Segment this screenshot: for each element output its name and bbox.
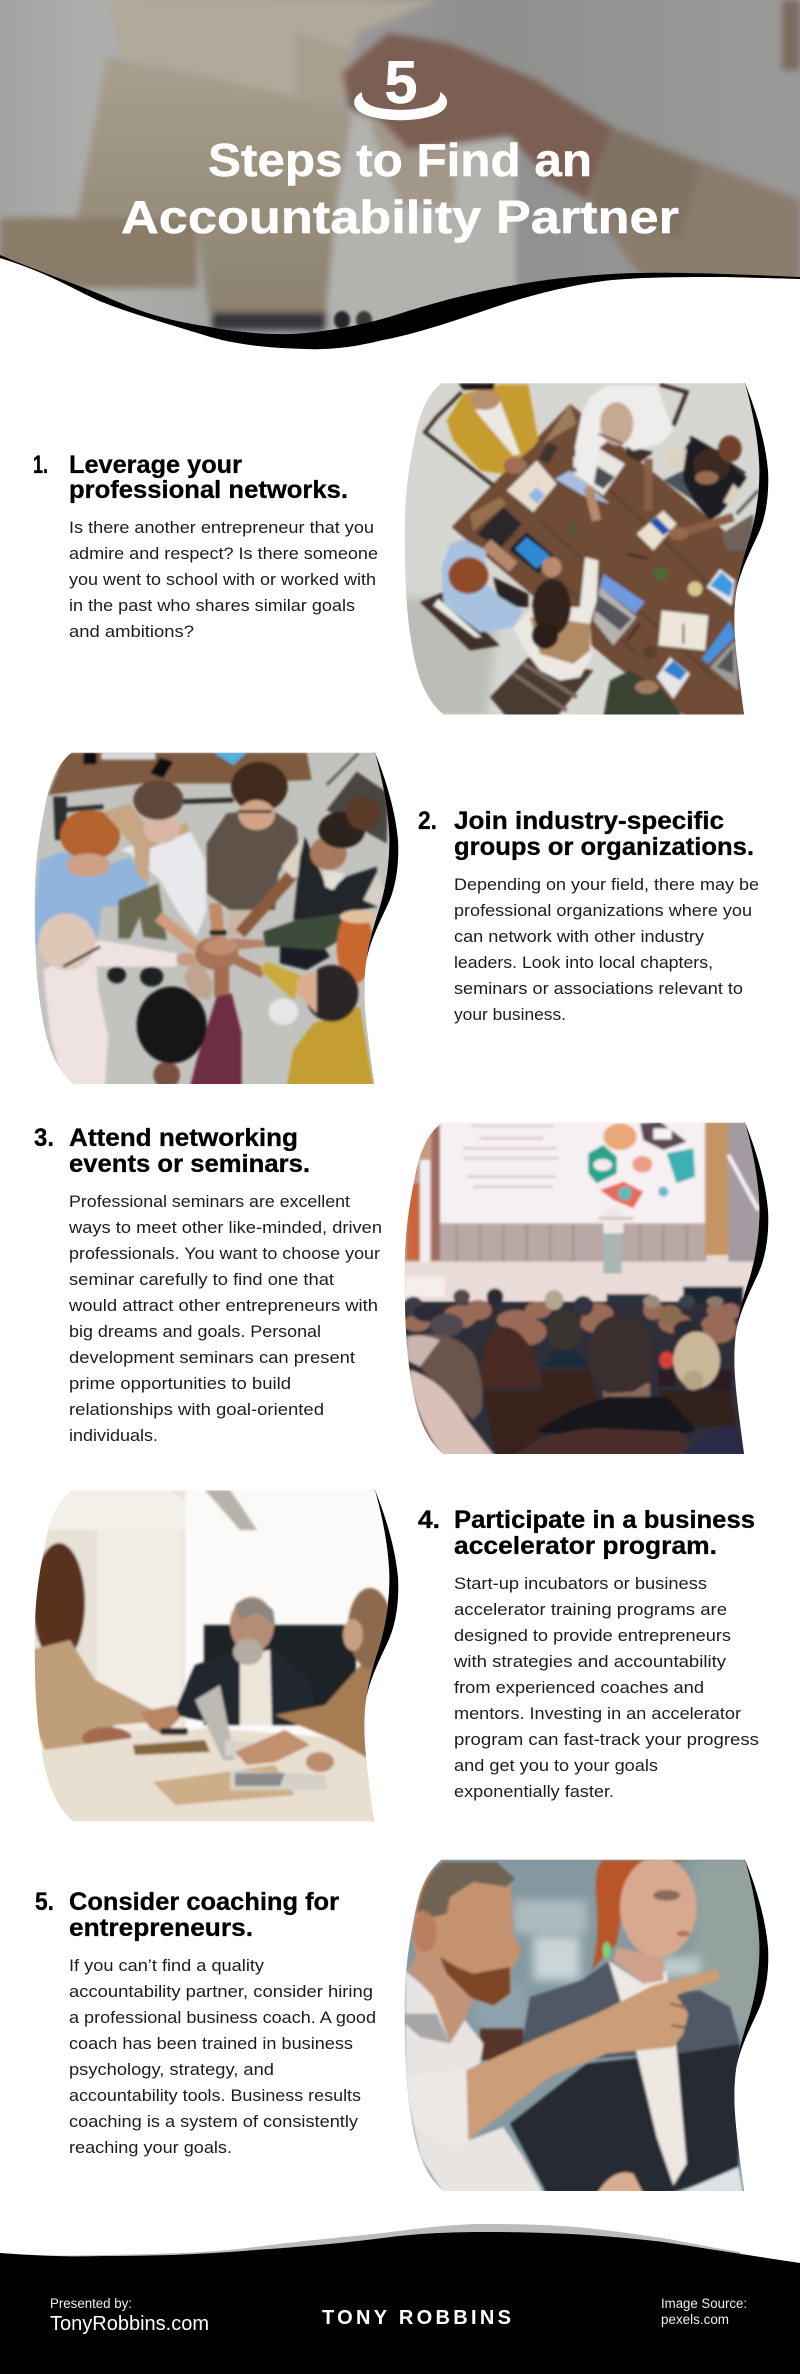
step 3 body: development seminars can present — [69, 1349, 355, 1367]
step 2 body: seminars or associations relevant to — [454, 980, 743, 998]
step 4 body: program can fast-track your progress — [454, 1731, 759, 1749]
step 5 body: reaching your goals. — [69, 2139, 232, 2157]
step 1 heading: 1. — [33, 451, 48, 479]
pointing arm — [465, 1968, 722, 2141]
title: Accountability Partner — [121, 191, 679, 243]
icon: number 5 with crescent: 5 — [384, 49, 418, 116]
step 1 heading — [33, 451, 348, 504]
laptops — [195, 1685, 327, 1790]
step 3 text — [34, 1124, 382, 1445]
step 5 heading: 5. — [35, 1888, 54, 1916]
step 3 heading: Attend networking — [69, 1124, 298, 1152]
step 4 body: Start-up incubators or business — [454, 1575, 707, 1593]
step 3 body: relationships with goal-oriented — [69, 1401, 324, 1419]
woman at centre — [490, 557, 598, 717]
step 2 body — [454, 876, 759, 1024]
step 3 body: seminar carefully to find one that — [69, 1271, 334, 1289]
foreground head at left — [407, 1334, 495, 1457]
wave: black swoosh — [0, 255, 800, 349]
step 3 body: individuals. — [69, 1427, 158, 1445]
woman with red hair — [510, 1857, 740, 2194]
image source: Image Source: — [661, 2296, 747, 2311]
step 3 photo: seminar audience — [400, 1120, 770, 1457]
step 3 body: Professional seminars are excellent — [69, 1193, 350, 1211]
step 2 text — [418, 807, 759, 1024]
step 4 body: exponentially faster. — [454, 1783, 614, 1801]
blue shirt man — [420, 539, 562, 650]
step 4 heading — [418, 1506, 755, 1560]
step 5 body: If you can’t find a quality — [69, 1957, 265, 1975]
step 5 body: psychology, strategy, and — [69, 2061, 274, 2079]
step 5 heading: entrepreneurs. — [69, 1914, 253, 1942]
step 5 text — [35, 1888, 376, 2157]
laptops and devices — [477, 442, 738, 699]
yellow jacket man — [447, 383, 538, 474]
step 5 body — [69, 1957, 376, 2157]
step 3 heading: events or seminars. — [69, 1150, 310, 1178]
step 5 body: coach has been trained in business — [69, 2035, 353, 2053]
step 1 photo: team around table — [400, 380, 770, 717]
woman in dark top — [637, 435, 747, 550]
step 4 body: with strategies and accountability — [453, 1653, 727, 1671]
step 4 body: from experienced coaches and — [454, 1679, 704, 1697]
icon: number 5 with crescent — [354, 49, 447, 120]
step 1 body: and ambitions? — [69, 623, 194, 641]
projection screen — [440, 1122, 705, 1223]
logo: Tony Robbins: TONY ROBBINS — [322, 2307, 511, 2329]
person in maroon — [137, 967, 242, 1088]
step 2 heading — [418, 807, 754, 861]
header banner — [0, 0, 800, 360]
step 2 heading: groups or organizations. — [454, 833, 754, 861]
step 5 heading: Consider coaching for — [69, 1888, 339, 1916]
presented by: Presented by: — [50, 2296, 132, 2311]
step 3 body: ways to meet other like-minded, driven — [68, 1219, 382, 1237]
man in brown sweater — [207, 762, 298, 937]
step 1 body: Is there another entrepreneur that you — [69, 519, 374, 537]
step 5 photo: man pointing — [400, 1857, 770, 2194]
header photo: handshake — [0, 0, 800, 360]
woman at right — [234, 1586, 388, 1774]
person in yellow — [230, 957, 373, 1087]
step 1 body: you went to school with or worked with — [69, 571, 376, 589]
footer gray wave — [0, 2224, 740, 2270]
step 2 body: Depending on your field, there may be — [454, 876, 759, 894]
step 2 photo: hands together — [30, 750, 400, 1088]
presented by — [50, 2296, 209, 2335]
step 4 body: mentors. Investing in an accelerator — [454, 1705, 742, 1723]
woman at left — [30, 1543, 180, 1752]
step 5 body: a professional business coach. A good — [69, 2009, 376, 2027]
step 3 body: would attract other entrepreneurs with — [68, 1297, 378, 1315]
step 4 body: accelerator training programs are — [454, 1601, 727, 1619]
step 4 heading: accelerator program. — [454, 1532, 717, 1560]
step 2 body: your business. — [454, 1006, 566, 1024]
presented by: TonyRobbins.com — [50, 2313, 209, 2335]
footer — [0, 2224, 800, 2374]
blonde woman — [658, 1332, 732, 1392]
step 3 heading: 3. — [34, 1124, 54, 1152]
step 2 body: leaders. Look into local chapters, — [454, 954, 713, 972]
step 3 body: big dreams and goals. Personal — [69, 1323, 321, 1341]
step 4 heading: 4. — [418, 1506, 440, 1534]
step 1 heading: Leverage your — [69, 451, 242, 479]
step 4 body: designed to provide entrepreneurs — [454, 1627, 731, 1645]
title: Steps to Find an — [208, 134, 592, 186]
step 4 body: and get you to your goals — [454, 1757, 658, 1775]
step 3 heading — [34, 1124, 310, 1178]
step 1 text — [33, 451, 378, 641]
step 2 body: can network with other industry — [454, 928, 705, 946]
title — [121, 134, 679, 243]
step 3 body: professionals. You want to choose your — [69, 1245, 381, 1263]
step 5 heading — [35, 1888, 339, 1942]
man in foreground — [537, 1315, 697, 1433]
blue shirt person — [35, 810, 163, 947]
woman in black vest — [240, 797, 385, 933]
man with beard — [405, 1862, 543, 2194]
step 5 body: accountability tools. Business results — [69, 2087, 361, 2105]
image source: pexels.com — [661, 2312, 729, 2327]
step 1 body: in the past who shares similar goals — [69, 597, 355, 615]
step 5 body: accountability partner, consider hiring — [69, 1983, 373, 2001]
bald man in white shirt — [575, 385, 673, 520]
step 2 heading: 2. — [418, 807, 437, 835]
step 3 body — [68, 1193, 382, 1445]
bearded man — [174, 1595, 276, 1727]
step 3 body: prime opportunities to build — [69, 1375, 291, 1393]
speaker on stage — [598, 1207, 633, 1273]
step 2 body: professional organizations where you — [454, 902, 752, 920]
step 5 body: coaching is a system of consistently — [69, 2113, 359, 2131]
step 4 photo: meeting handshake — [30, 1488, 400, 1824]
image source — [661, 2296, 747, 2327]
step 1 heading: professional networks. — [69, 476, 348, 504]
woman with scarf — [103, 780, 207, 987]
step 2 heading: Join industry-specific — [454, 807, 724, 835]
audience back rows — [403, 1288, 740, 1345]
step 4 text — [418, 1506, 759, 1801]
step 4 heading: Participate in a business — [454, 1506, 755, 1534]
step 1 body: admire and respect? Is there someone — [69, 545, 378, 563]
step 4 body — [453, 1575, 759, 1801]
footer black band — [0, 2232, 800, 2374]
step 1 body — [69, 519, 378, 641]
bald man — [38, 913, 197, 1087]
